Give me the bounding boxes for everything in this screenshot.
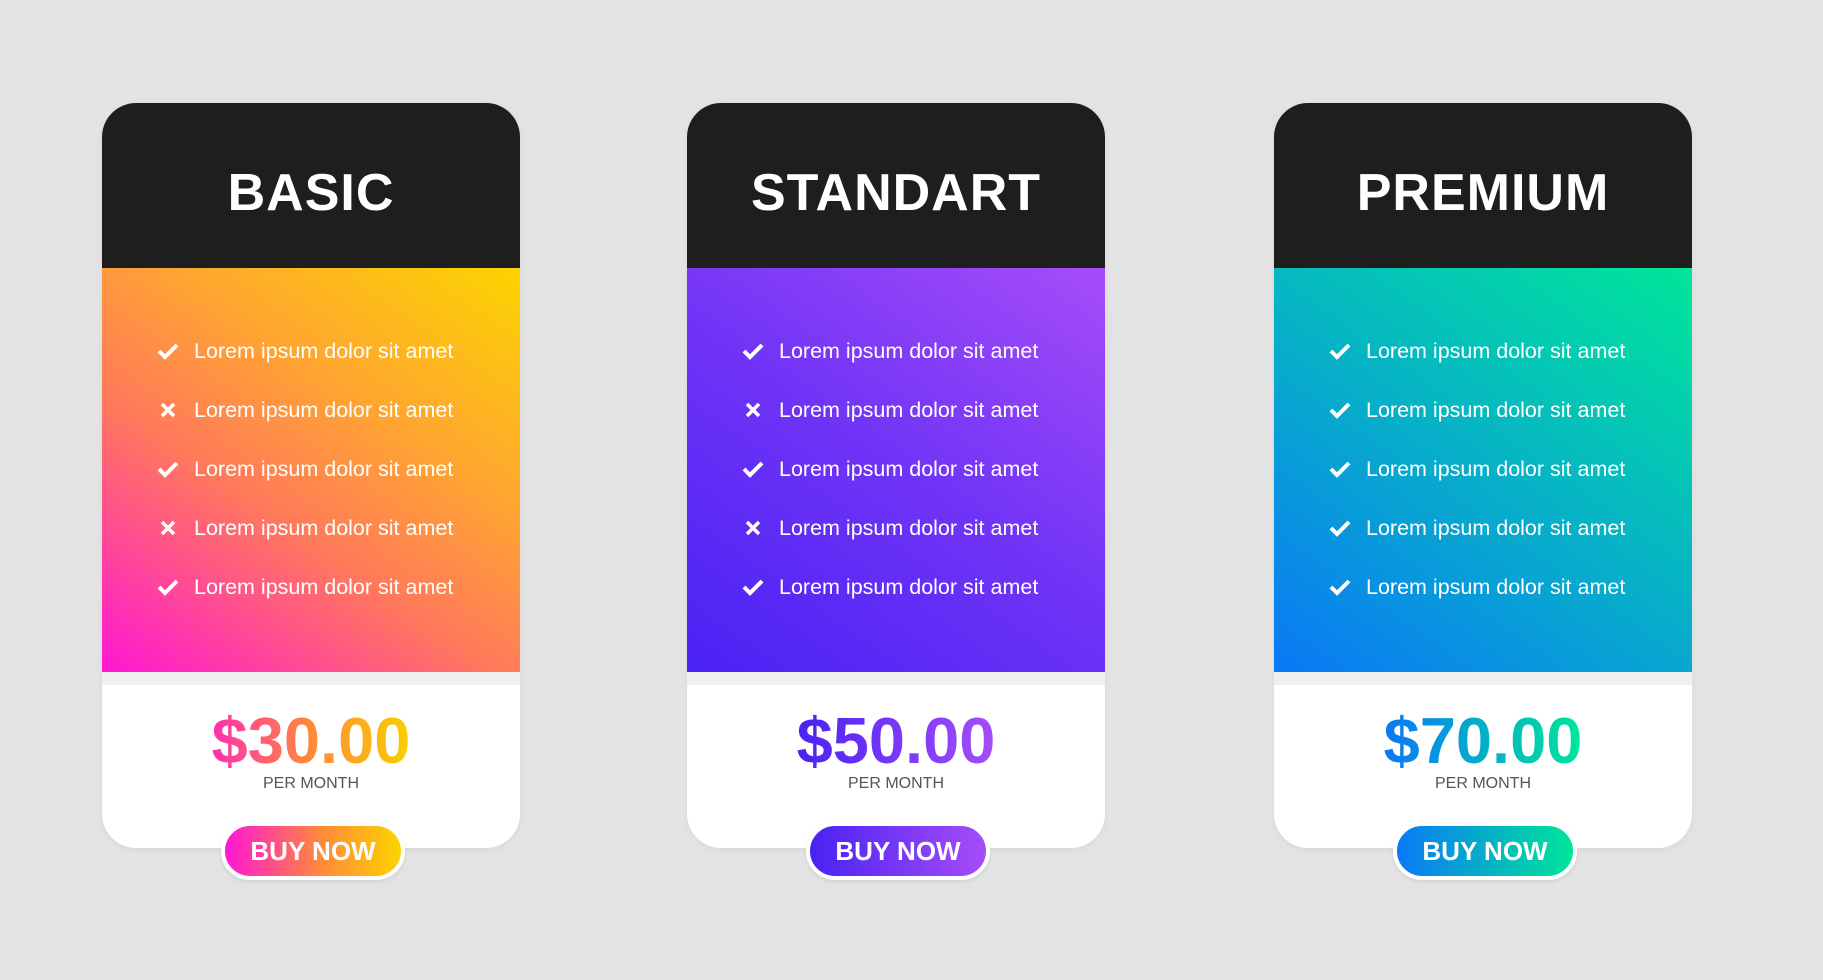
price: standart: $50.00 — [797, 704, 995, 777]
button: standart: BUY NOW — [835, 836, 961, 866]
button: premium: BUY NOW — [1422, 836, 1548, 866]
feature row 5 — [158, 575, 454, 599]
feature panel: standart: Lorem ipsum dolor sit amet — [779, 457, 1038, 481]
feature panel: basic: Lorem ipsum dolor sit amet — [194, 457, 453, 481]
feature row 1 — [158, 339, 454, 363]
header: STANDART — [687, 103, 1105, 268]
feature row 1 — [742, 339, 1038, 363]
button: standart — [806, 822, 990, 880]
header: BASIC — [102, 103, 520, 268]
feature panel: premium — [1274, 268, 1692, 672]
feature row 5 — [742, 575, 1038, 599]
header: PREMIUM: PREMIUM — [1357, 164, 1609, 222]
feature panel: standart — [687, 268, 1105, 672]
header: PREMIUM — [1274, 103, 1692, 268]
feature panel: basic: Lorem ipsum dolor sit amet — [194, 575, 453, 599]
per month label: PER MONTH — [1435, 775, 1531, 792]
feature row 2 — [160, 398, 454, 422]
feature row 2 — [1330, 398, 1626, 422]
card: premium — [1274, 103, 1692, 848]
feature row 4 — [1330, 516, 1626, 540]
feature panel: premium: Lorem ipsum dolor sit amet — [1366, 339, 1625, 363]
feature row 3 — [742, 457, 1038, 481]
feature panel: basic: Lorem ipsum dolor sit amet — [194, 339, 453, 363]
card: standart — [687, 103, 1105, 848]
feature panel: premium: Lorem ipsum dolor sit amet — [1366, 457, 1625, 481]
card: basic — [102, 103, 520, 848]
feature row 4 — [160, 516, 454, 540]
feature row 2 — [746, 398, 1038, 422]
feature panel: premium: Lorem ipsum dolor sit amet — [1366, 398, 1625, 422]
feature panel: premium: Lorem ipsum dolor sit amet — [1366, 575, 1625, 599]
feature panel: premium: Lorem ipsum dolor sit amet — [1366, 516, 1625, 540]
header: BASIC: BASIC — [228, 164, 394, 222]
feature panel: standart: Lorem ipsum dolor sit amet — [779, 516, 1038, 540]
feature panel: basic: Lorem ipsum dolor sit amet — [194, 398, 453, 422]
button: basic — [221, 822, 405, 880]
feature row 5 — [1330, 575, 1626, 599]
feature panel: basic: Lorem ipsum dolor sit amet — [194, 516, 453, 540]
feature panel: basic — [102, 268, 520, 672]
feature row 3 — [1330, 457, 1626, 481]
price: premium: $70.00 — [1384, 704, 1582, 777]
per month label: PER MONTH — [848, 775, 944, 792]
feature panel: standart: Lorem ipsum dolor sit amet — [779, 339, 1038, 363]
feature row 1 — [1330, 339, 1626, 363]
feature panel: standart: Lorem ipsum dolor sit amet — [779, 398, 1038, 422]
button: basic: BUY NOW — [250, 836, 376, 866]
price: basic: $30.00 — [212, 704, 410, 777]
feature row 4 — [746, 516, 1038, 540]
per month label: PER MONTH — [263, 775, 359, 792]
button: premium — [1393, 822, 1577, 880]
feature row 3 — [158, 457, 454, 481]
feature panel: standart: Lorem ipsum dolor sit amet — [779, 575, 1038, 599]
header: STANDART: STANDART — [751, 164, 1041, 222]
